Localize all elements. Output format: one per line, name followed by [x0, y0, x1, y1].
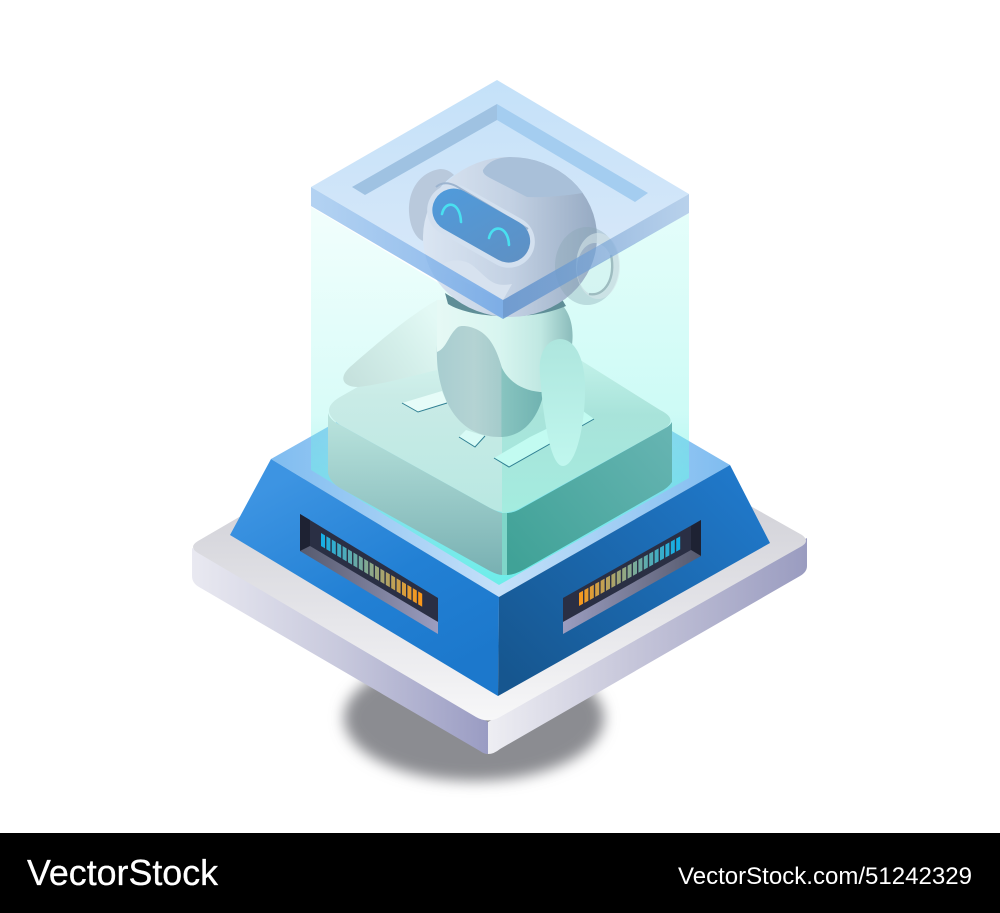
- right gauge panel: [563, 520, 701, 634]
- visor top edge: [436, 183, 528, 229]
- right eye: [489, 229, 509, 245]
- left eye: [442, 205, 461, 222]
- foot plates: [402, 391, 594, 467]
- lid recess: [352, 104, 648, 202]
- left gauge panel: [300, 514, 438, 634]
- platform right face: [507, 422, 672, 575]
- slab right face: [488, 538, 807, 754]
- robot body: [343, 293, 573, 437]
- robot neck collar: [445, 293, 566, 316]
- head left ear: [409, 169, 454, 241]
- right ear: [555, 227, 620, 305]
- pedestal right face: [498, 465, 770, 696]
- footer bar: [0, 833, 1000, 913]
- robot chest: [437, 296, 573, 392]
- pedestal left face: [230, 459, 499, 696]
- brand logo text: VectorStock: [27, 852, 219, 893]
- pedestal top surface: [271, 330, 730, 597]
- inner platform: [328, 308, 672, 575]
- head chin highlight: [432, 260, 512, 300]
- visor frame: [418, 175, 544, 277]
- image id: VectorStock.com/51242329: [678, 863, 972, 890]
- robot head: [409, 157, 620, 317]
- slab top face: [193, 365, 806, 720]
- slab left face: [192, 548, 488, 754]
- robot left arm: [343, 300, 437, 387]
- base slab: [192, 365, 807, 754]
- robot torso: [437, 320, 544, 437]
- blue pedestal: [230, 330, 770, 696]
- platform left face: [328, 413, 502, 575]
- floor shadow: [344, 655, 604, 781]
- lid top: [311, 80, 689, 300]
- robot right arm: [540, 339, 585, 466]
- head sphere: [423, 157, 597, 317]
- right gauge bars: [579, 536, 680, 606]
- lid edge bands: [311, 187, 689, 319]
- visor screen: [425, 181, 538, 270]
- left gauge bars: [321, 533, 422, 607]
- head top shading: [483, 157, 592, 197]
- glass case walls: [311, 207, 689, 585]
- platform top: [329, 308, 671, 512]
